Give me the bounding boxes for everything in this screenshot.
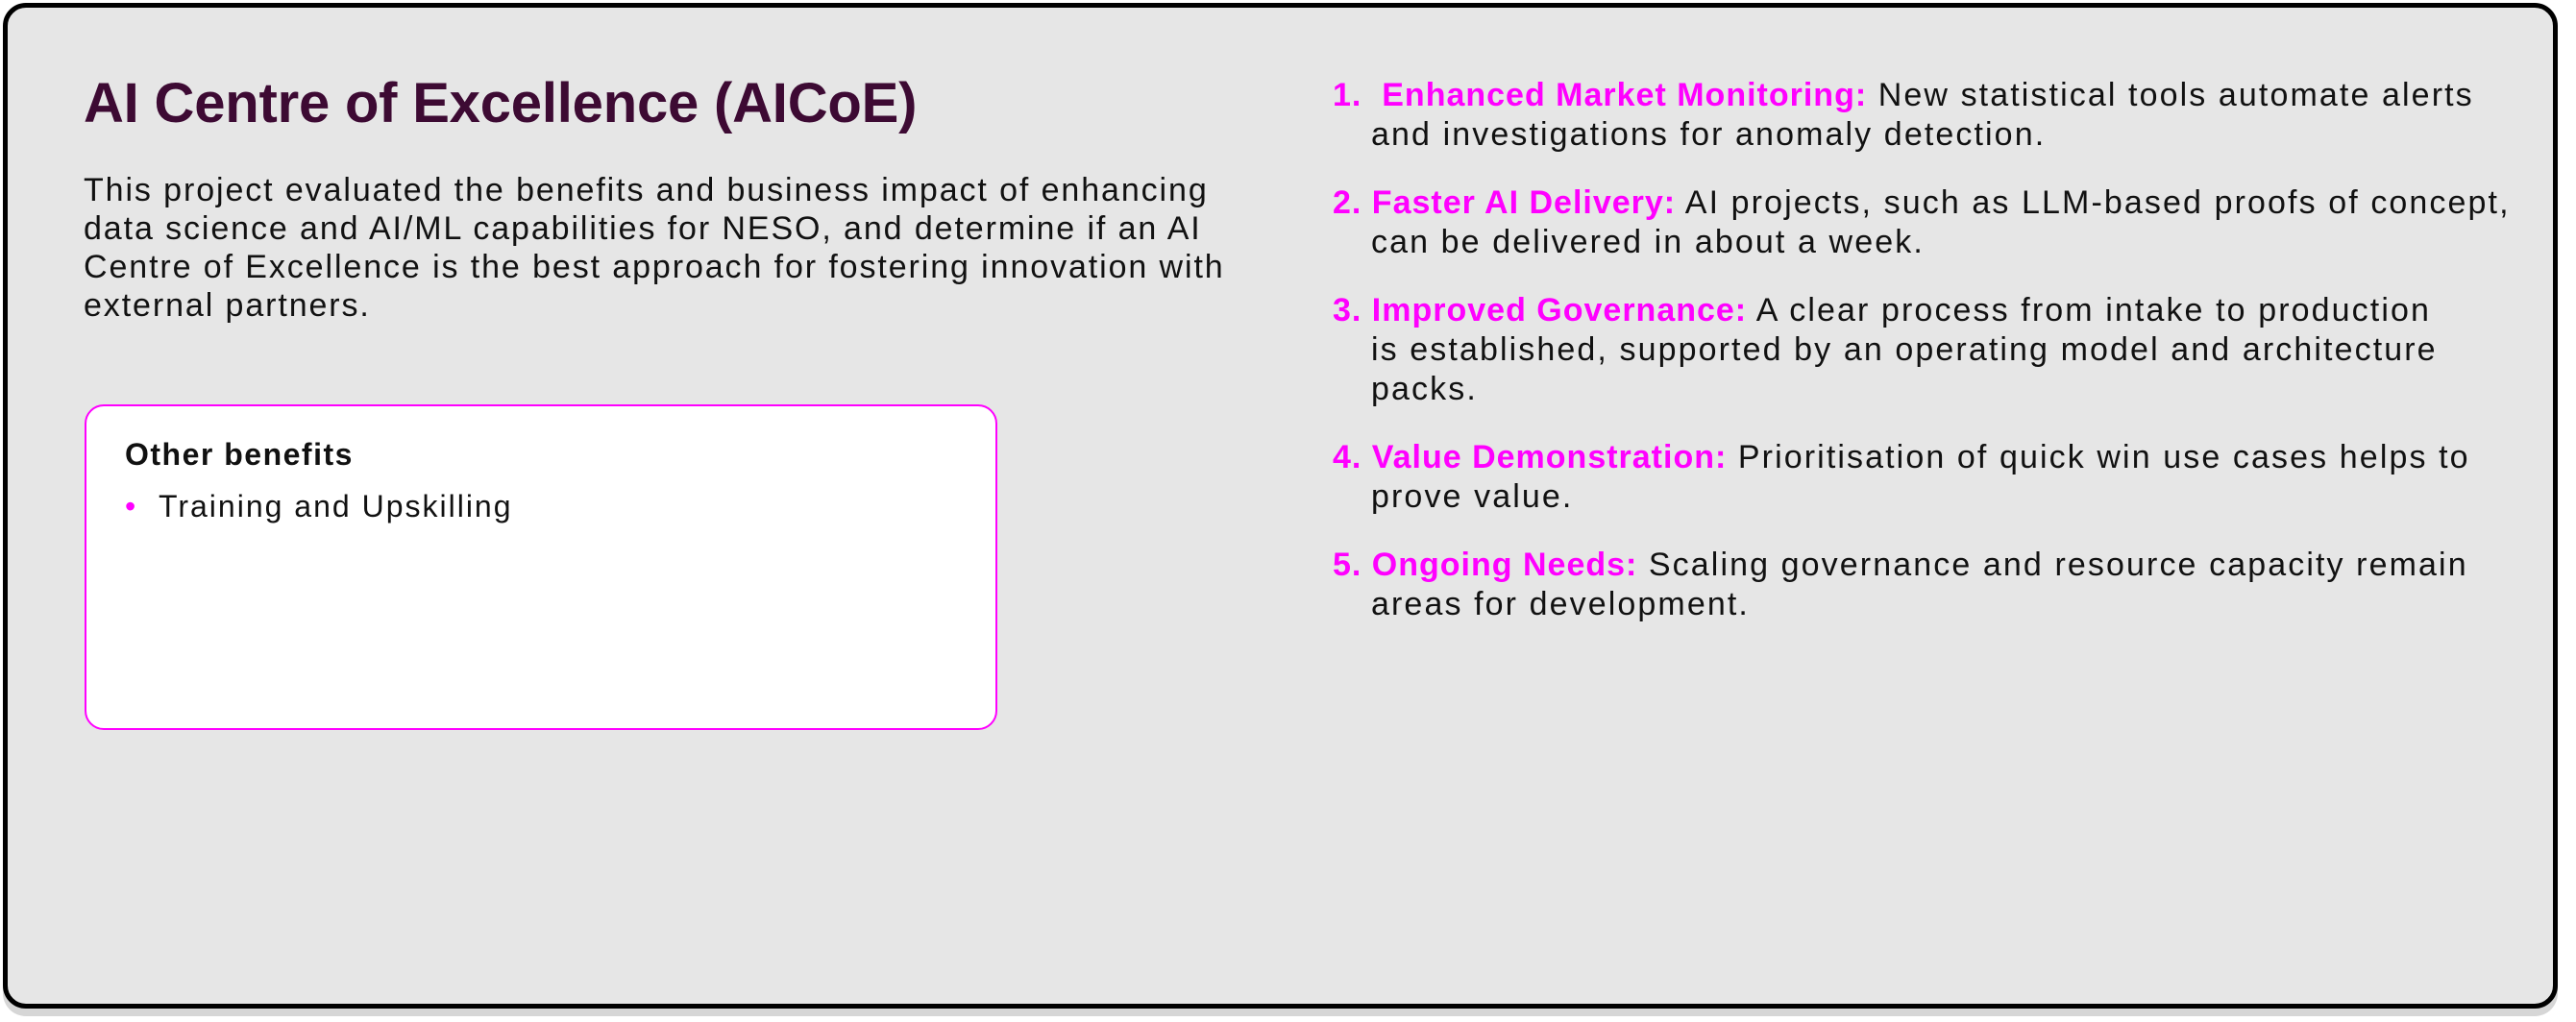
list: key findings (1333, 77, 2511, 622)
item 5 (1333, 547, 2468, 622)
item 2: can be delivered in about a week. (1371, 224, 1925, 260)
bullet list item: • Training and Upskilling (125, 489, 513, 523)
text block: description: Centre of Excellence is the best approach for fostering innovation with (84, 249, 1225, 285)
item 3: 3. Improved Governance: A clear process from intake to production (1333, 292, 2431, 328)
item 5: areas for development. (1371, 586, 1750, 622)
item 3: is established, supported by an operating model and architecture (1371, 331, 2438, 368)
item 1 (1333, 77, 2474, 153)
title: AI Centre of Excellence (AICoE) (84, 72, 917, 134)
item 3 (1333, 292, 2438, 407)
heading: other benefits: Other benefits (125, 437, 354, 472)
item 3: packs. (1371, 371, 1478, 407)
item 5: 5. Ongoing Needs: Scaling governance and resource capacity remain (1333, 547, 2468, 583)
item 1: and investigations for anomaly detection. (1371, 116, 2046, 153)
panel: other benefits (85, 404, 997, 730)
text block: description: data science and AI/ML capabilities for NESO, and determine if an AI (84, 210, 1202, 247)
item 4: 4. Value Demonstration: Prioritisation of quick win use cases helps to (1333, 439, 2470, 475)
item 4: prove value. (1371, 478, 1573, 515)
text block: description: This project evaluated the benefits and business impact of enhancing (84, 172, 1209, 208)
text block: description: external partners. (84, 287, 371, 324)
item 1: 1. Enhanced Market Monitoring: New statistical tools automate alerts (1333, 77, 2474, 113)
text block: description (84, 172, 1225, 324)
item 2 (1333, 184, 2511, 260)
item 2: 2. Faster AI Delivery: AI projects, such as LLM-based proofs of concept, (1333, 184, 2511, 221)
item 4 (1333, 439, 2470, 515)
